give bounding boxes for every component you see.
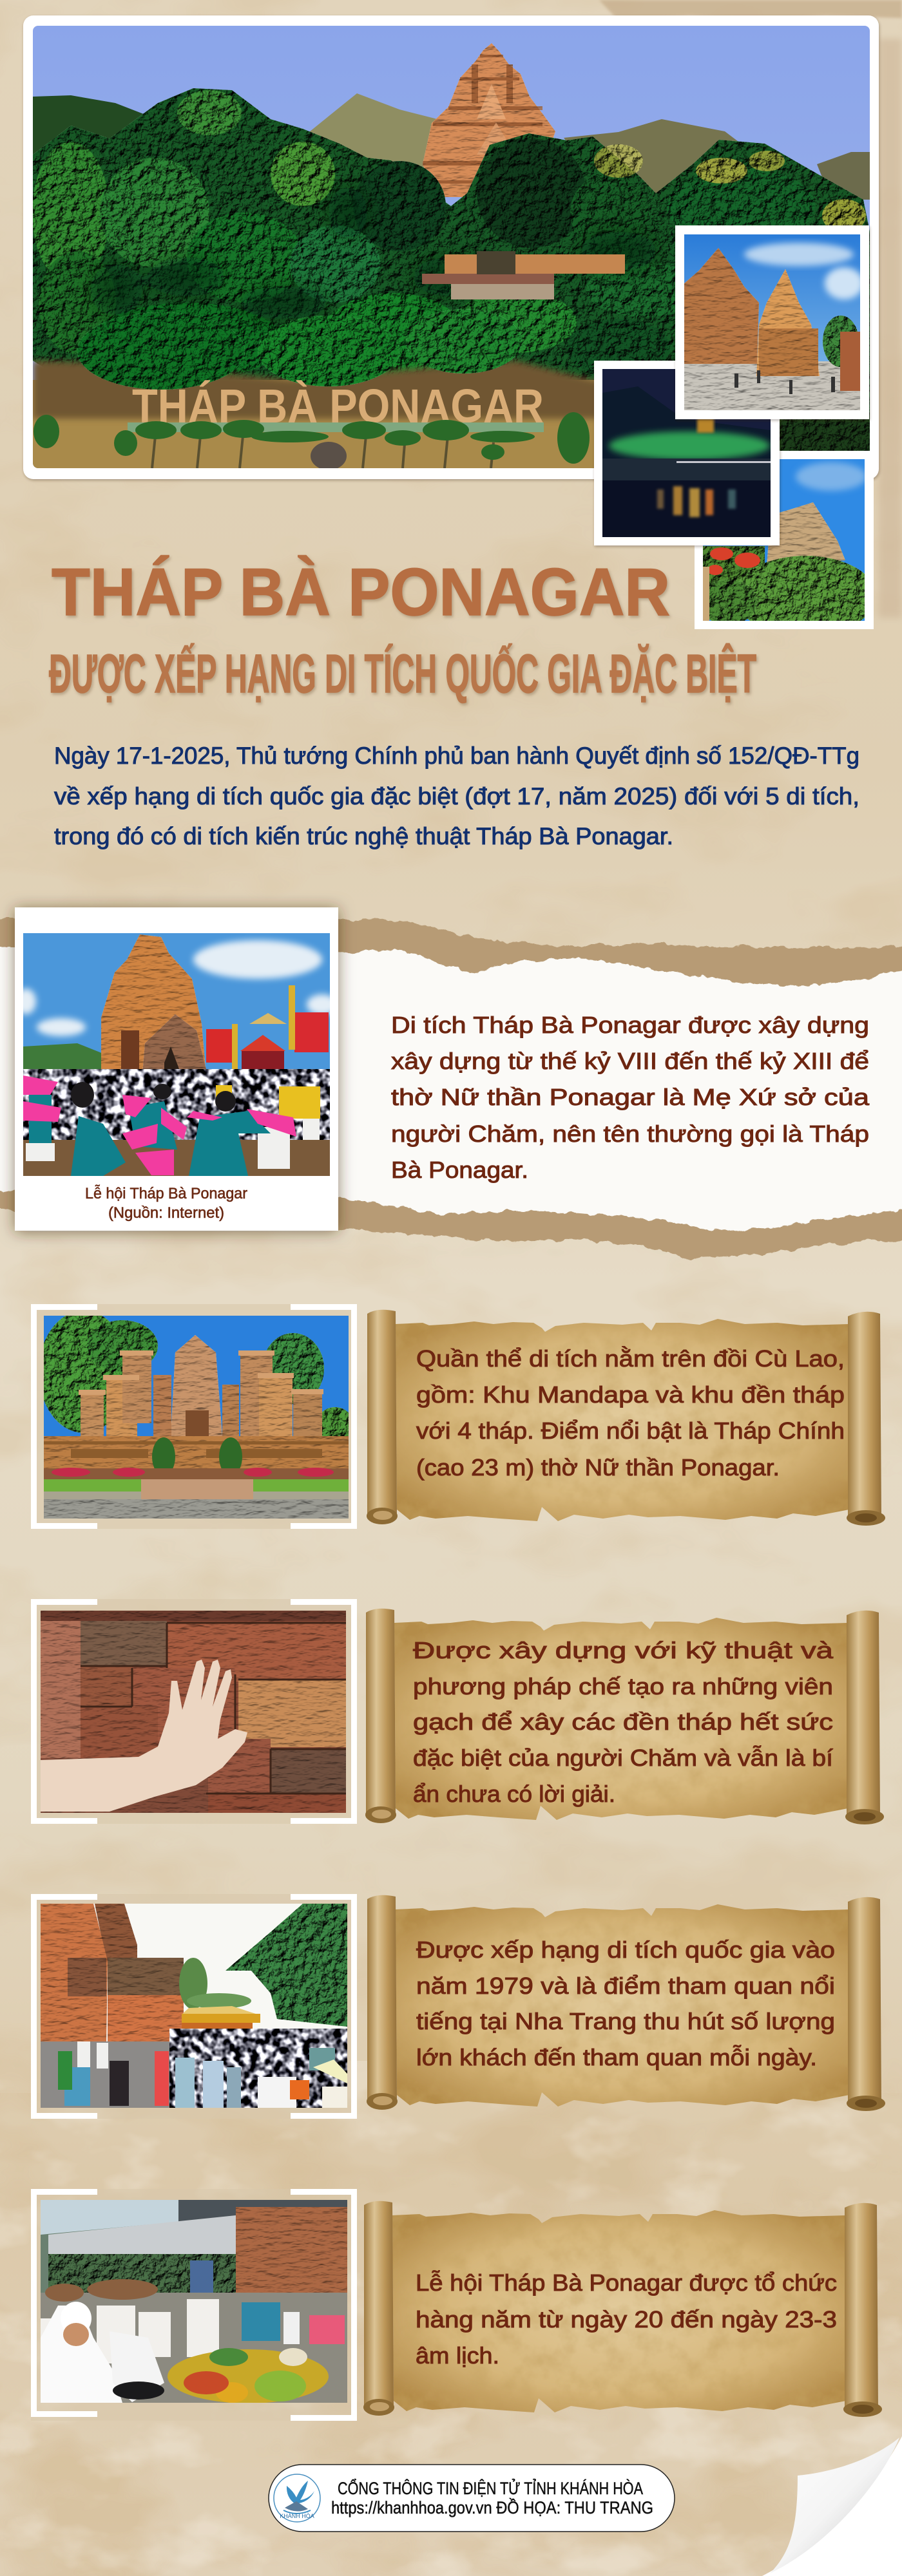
building at foot of tower (422, 251, 625, 299)
footer credit pill (269, 2465, 675, 2532)
band text: Bà Ponagar. (391, 1157, 528, 1183)
scroll 2: phương pháp chế tạo ra những viên (413, 1673, 833, 1700)
panel: torn paper band (0, 919, 902, 1259)
scroll 3 (367, 1895, 885, 2111)
panel: hero photo with white frame (23, 15, 879, 479)
scroll 4: hàng năm từ ngày 20 đến ngày 23-3 (416, 2306, 837, 2333)
scroll 4: Lễ hội Tháp Bà Ponagar được tổ chức (416, 2269, 837, 2296)
scroll 1: (cao 23 m) thờ Nữ thần Ponagar. (416, 1454, 780, 1481)
foliage mass (33, 88, 870, 412)
photo: temple tower daytime close-up (695, 451, 876, 636)
row 4: offering ceremony photo (31, 2189, 357, 2421)
row 2: hand on brick wall photo (31, 1599, 357, 1824)
band text: thờ Nữ thần Ponagar là Mẹ Xứ sở của (391, 1084, 870, 1110)
scroll 4 (363, 2201, 882, 2417)
intro paragraph: trong đó có di tích kiến trúc nghệ thuật Tháp Bà Ponagar. (54, 823, 673, 849)
scroll 4: âm lịch. (416, 2342, 499, 2369)
scroll 3: tiếng tại Nha Trang thu hút số lượng (416, 2008, 835, 2034)
festival caption: (Nguồn: Internet) (108, 1204, 224, 1222)
icon: Khanh Hoa logo: KHÁNH HÒA (280, 2513, 314, 2519)
footer credit pill: CỔNG THÔNG TIN ĐIỆN TỬ TỈNH KHÁNH HÒA (338, 2477, 643, 2498)
photo: two brick towers (675, 225, 869, 419)
scroll 2: đặc biệt của người Chăm và vẫn là bí (413, 1745, 833, 1771)
intro paragraph (54, 743, 859, 849)
scroll 2: ẩn chưa có lời giải. (413, 1781, 615, 1807)
scroll 1: với 4 tháp. Điểm nổi bật là Tháp Chính (416, 1417, 845, 1444)
intro paragraph: về xếp hạng di tích quốc gia đặc biệt (đợt 17, năm 2025) đối với 5 di tích, (54, 783, 859, 810)
tower in hero photo (423, 43, 555, 197)
row 3: crowd at the towers photo (31, 1894, 357, 2119)
intro paragraph: Ngày 17-1-2025, Thủ tướng Chính phủ ban hành Quyết định số 152/QĐ-TTg (54, 743, 859, 769)
photo sign: Thap Ba Ponagar: THÁP BÀ PONAGAR (132, 379, 544, 433)
scroll 2: gạch để xây các đền tháp hết sức (413, 1709, 833, 1735)
fruit offerings (168, 2348, 329, 2403)
page curl at bottom-right corner (762, 2436, 902, 2576)
foliage shadow gaps (90, 187, 657, 319)
band text (391, 1012, 870, 1183)
panel: festival photo card (15, 907, 338, 1231)
scroll 3: lớn khách đến tham quan mỗi ngày. (416, 2044, 817, 2070)
band text: Di tích Tháp Bà Ponagar được xây dựng (391, 1012, 869, 1038)
scroll 3: năm 1979 và là điểm tham quan nổi (416, 1973, 835, 1999)
scroll 2: Được xây dựng với kỹ thuật và (413, 1637, 834, 1663)
festival photo (15, 933, 338, 1176)
hand and arm (41, 1660, 247, 1812)
band text: xây dựng từ thế kỷ VIII đến thế kỷ XIII để (391, 1048, 869, 1074)
title: THÁP BÀ PONAGAR (52, 555, 670, 630)
row 1: complex of towers photo (31, 1304, 357, 1529)
scroll 2 (365, 1609, 884, 1824)
footer credit pill: https://khanhhoa.gov.vn ĐỒ HỌA: THU TRANG (331, 2497, 653, 2517)
scroll 1: Quần thể di tích nằm trên đồi Cù Lao, (416, 1345, 845, 1372)
icon: Khanh Hoa logo (274, 2474, 320, 2522)
scroll 1: gồm: Khu Mandapa và khu đền tháp (416, 1381, 845, 1408)
scroll 1 (367, 1310, 885, 1526)
festival caption: Lễ hội Tháp Bà Ponagar (85, 1185, 247, 1202)
band text: người Chăm, nên tên thường gọi là Tháp (391, 1121, 869, 1147)
festival caption (85, 1185, 247, 1222)
photo: tower at night over the river (594, 361, 780, 545)
scroll 3: Được xếp hạng di tích quốc gia vào (416, 1937, 835, 1963)
